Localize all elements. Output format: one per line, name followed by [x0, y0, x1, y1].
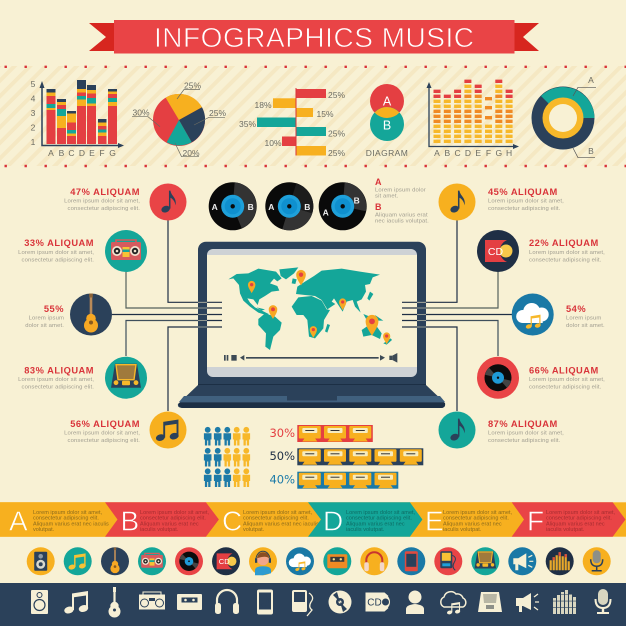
item: 56% aliquam: 56% ALIQUAM [70, 419, 140, 429]
segment C: C [222, 506, 242, 537]
item: 47% aliquam: Lorem ipsum dolor sit amet, [64, 198, 140, 204]
segment C: Lorem ipsum dolor sit amet, [243, 510, 313, 516]
bar icon: cloud [441, 592, 466, 615]
bar icon: guitar [108, 587, 120, 618]
segment A: volutpat. [33, 527, 55, 533]
segment F: iaculis volutpat. [546, 527, 585, 533]
segment F: F [527, 506, 544, 537]
segment D: Lorem ipsum dolor sit amet, [346, 510, 416, 516]
bar icon: headphones [215, 590, 239, 614]
30% row [269, 425, 373, 442]
item: 87% aliquam: 87% ALIQUAM [488, 419, 558, 429]
segment D [308, 502, 422, 537]
segment C [206, 502, 321, 537]
title ribbon [89, 20, 539, 54]
diverging bar chart: 10% [264, 138, 282, 148]
30% row: 30% [269, 426, 295, 440]
arrow band [0, 502, 626, 537]
connector lines [112, 220, 512, 411]
icon: equalizer [546, 547, 574, 575]
stacked bar chart: B [59, 148, 65, 158]
vinyl legend: B [375, 202, 382, 212]
vinyl legend: Aliquam varius erat [375, 212, 428, 218]
icon: phone [397, 547, 425, 575]
vinyl record 2: A [268, 202, 274, 212]
donut chart: B [588, 146, 594, 156]
stacked bar chart: G [109, 148, 116, 158]
bar icon: cd sleeve [366, 592, 390, 612]
segment B [105, 502, 219, 537]
icon: radio [471, 547, 499, 575]
item: 66% aliquam: consectetur adipiscing elit. [529, 384, 602, 390]
item: 22% aliquam [477, 230, 605, 272]
segment D: Aliquam varius erat nec [346, 521, 405, 527]
donut chart [532, 75, 596, 158]
item: 22% aliquam: consectetur adipiscing elit. [529, 258, 602, 264]
venn diagram: DIAGRAM [366, 148, 408, 158]
segment D: consectetur adipiscing elit. [346, 516, 412, 522]
bar icon: cd sleeve: CD [367, 598, 382, 608]
vinyl record 1 [209, 182, 257, 230]
item: 66% aliquam [477, 357, 605, 399]
stacked bar chart: C [68, 148, 75, 158]
bar icon: phone [257, 590, 273, 614]
item: 55%: 55% [44, 304, 64, 314]
equalizer chart [426, 78, 519, 158]
equalizer chart: F [486, 148, 491, 158]
stacked bar chart: 4 [31, 94, 36, 104]
bar icon: megaphone [516, 593, 539, 612]
vinyl legend [375, 177, 429, 224]
segment F: Aliquam varius erat nec [546, 521, 605, 527]
title: INFOGRAPHICS MUSIC [154, 22, 474, 53]
item: 56% aliquam: Lorem ipsum dolor sit amet, [64, 430, 140, 436]
item: 66% aliquam: 66% ALIQUAM [529, 366, 599, 376]
icon: cloud music [286, 547, 314, 575]
item: 47% aliquam: 47% ALIQUAM [70, 187, 140, 197]
laptop [178, 242, 445, 408]
bar icon: note [63, 591, 89, 615]
dark icon bar [0, 583, 626, 626]
vinyl record 2 [265, 182, 313, 230]
vinyl legend: sit amet. [375, 194, 399, 200]
striped chart band [0, 66, 626, 166]
map pins [248, 270, 390, 344]
icon: cd [212, 547, 240, 575]
segment B: Lorem ipsum dolor sit amet, [140, 510, 210, 516]
bar icon: microphone [596, 589, 610, 614]
segment A [0, 502, 118, 537]
item: 33% aliquam: 33% ALIQUAM [24, 238, 94, 248]
item: 56% aliquam [64, 412, 186, 448]
50% row [269, 448, 423, 465]
segment C: Aliquam varius erat nec iaculis [243, 521, 319, 527]
item: 45% aliquam [438, 184, 564, 220]
item: 83% aliquam: Lorem ipsum dolor sit amet, [18, 377, 94, 383]
colored icon row [27, 547, 611, 575]
icon: megaphone [508, 547, 536, 575]
segment C: volutpat. [243, 527, 265, 533]
venn diagram: B [383, 118, 391, 132]
media player controls [224, 353, 397, 363]
equalizer chart: D [465, 148, 471, 158]
pie chart: 30% [132, 108, 150, 118]
icon: double note [64, 547, 92, 575]
cassette rows [269, 425, 423, 489]
icon: listener with headphones [249, 547, 277, 575]
equalizer chart: H [506, 148, 512, 158]
item: 33% aliquam: Lorem ipsum dolor sit amet, [18, 250, 94, 256]
item: 22% aliquam: Lorem ipsum dolor sit amet, [529, 250, 605, 256]
vinyl record 3: A [323, 207, 329, 217]
segment A: consectetur adipiscing elit. [33, 516, 99, 522]
40% row [269, 472, 398, 489]
stacked bar chart: 1 [31, 137, 36, 147]
diverging bar chart: 35% [239, 119, 256, 129]
bar icon: player [292, 590, 313, 616]
segment F [512, 502, 626, 537]
stacked bar chart: A [48, 148, 54, 158]
segment C: consectetur adipiscing elit. [243, 516, 309, 522]
segment E [410, 502, 524, 537]
bar icon: listener [406, 590, 424, 614]
bar icon: radio [478, 592, 502, 612]
item: 56% aliquam: consectetur adipiscing elit. [68, 438, 140, 444]
item: 83% aliquam: consectetur adipiscing elit. [22, 384, 94, 390]
50% row: 50% [269, 449, 295, 463]
segment A: A [9, 506, 28, 537]
segment F: Lorem ipsum dolor sit amet, [546, 510, 616, 516]
icon: vinyl [175, 547, 203, 575]
segment D: iaculis volutpat. [346, 527, 385, 533]
item: 54%: 54% [566, 304, 586, 314]
stacked bar chart: 5 [31, 79, 36, 89]
world map [224, 267, 397, 363]
segment B: iaculis volutpat. [140, 527, 179, 533]
item: 45% aliquam: Lorem ipsum dolor sit amet, [488, 198, 564, 204]
item: 47% aliquam [64, 184, 186, 220]
people pictogram [204, 427, 250, 487]
equalizer chart: C [455, 148, 461, 158]
item: 55%: dolor sit amet. [25, 323, 64, 329]
stacked bar chart: F [99, 148, 105, 158]
item: 87% aliquam [438, 412, 564, 448]
item: 54%: Lorem ipsum [566, 316, 601, 322]
icon: microphone [583, 547, 611, 575]
item: 47% aliquam: consectetur adipiscing elit. [68, 206, 140, 212]
bar icon: compact disc [328, 590, 352, 614]
segment E: Lorem ipsum dolor sit amet, [443, 510, 513, 516]
segment A: Aliquam varius erat nec iaculis [33, 521, 109, 527]
item: 54% [512, 294, 605, 336]
vinyl record 3: B [354, 195, 360, 205]
pie chart [132, 80, 226, 158]
vinyl record 3 [319, 182, 367, 230]
icon: cassette [323, 547, 351, 575]
pie chart: 25% [184, 80, 201, 90]
vinyl record 2: B [304, 202, 310, 212]
stacked bar chart: D [79, 148, 85, 158]
icon: boombox [138, 547, 166, 575]
segment A: Lorem ipsum dolor sit amet, [33, 510, 103, 516]
item: 55% [25, 294, 112, 336]
segment E: iaculis volutpat. [443, 527, 482, 533]
stacked bar chart: 3 [31, 108, 36, 118]
vinyl record 1: B [248, 202, 254, 212]
diverging bar chart: 25% [328, 148, 345, 158]
segment B: consectetur adipiscing elit. [140, 516, 206, 522]
diverging bar chart [239, 88, 345, 158]
item: 45% aliquam: 45% ALIQUAM [488, 187, 558, 197]
icon: mp3 player [434, 547, 462, 575]
item: 66% aliquam: Lorem ipsum dolor sit amet, [529, 377, 605, 383]
vinyl records [209, 182, 367, 230]
donut chart: A [588, 75, 594, 85]
vinyl legend: nec iaculis volutpat. [375, 218, 429, 224]
item: 87% aliquam: Lorem ipsum dolor sit amet, [488, 430, 564, 436]
item: 45% aliquam: consectetur adipiscing elit. [488, 206, 561, 212]
diverging bar chart: 25% [328, 90, 345, 100]
equalizer chart: G [495, 148, 502, 158]
item: 33% aliquam [18, 230, 147, 272]
item: 33% aliquam: consectetur adipiscing elit. [22, 258, 94, 264]
segment F: consectetur adipiscing elit. [546, 516, 612, 522]
bar icon: equalizer [554, 590, 574, 614]
venn diagram [366, 84, 408, 158]
item: 54%: dolor sit amet. [566, 323, 605, 329]
pie chart: 20% [182, 148, 200, 158]
diverging bar chart: 18% [254, 100, 272, 110]
equalizer chart: E [475, 148, 481, 158]
icon: speaker [27, 547, 55, 575]
stacked bar chart: E [89, 148, 95, 158]
equalizer chart: B [444, 148, 450, 158]
segment E: consectetur adipiscing elit. [443, 516, 509, 522]
item: 83% aliquam: 83% ALIQUAM [24, 366, 94, 376]
equalizer chart: A [434, 148, 440, 158]
segment D: D [323, 506, 343, 537]
vinyl legend: Lorem ipsum dolor [375, 188, 426, 194]
icon: guitar [101, 547, 129, 575]
bar icon: cassette [177, 594, 202, 610]
bar icon: speaker [31, 590, 48, 614]
item: 55%: Lorem ipsum [29, 316, 64, 322]
pie chart: 25% [209, 108, 226, 118]
stacked bar chart [31, 79, 124, 158]
icon: headphones [360, 547, 388, 575]
segment E: E [425, 506, 444, 537]
vinyl legend: A [375, 177, 382, 187]
stacked bar chart: 2 [31, 122, 36, 132]
venn diagram: A [383, 94, 392, 108]
item: 87% aliquam: consectetur adipiscing elit. [488, 438, 561, 444]
diverging bar chart: 15% [316, 109, 334, 119]
segment B: B [120, 506, 139, 537]
item: 83% aliquam [18, 357, 147, 399]
vinyl record 1: A [212, 202, 218, 212]
diverging bar chart: 25% [328, 128, 345, 138]
item: 22% aliquam: 22% ALIQUAM [529, 238, 599, 248]
bar icon: boombox [139, 592, 165, 610]
segment E: Aliquam varius erat nec [443, 521, 502, 527]
40% row: 40% [269, 472, 295, 486]
segment B: Aliquam varius erat nec [140, 521, 199, 527]
